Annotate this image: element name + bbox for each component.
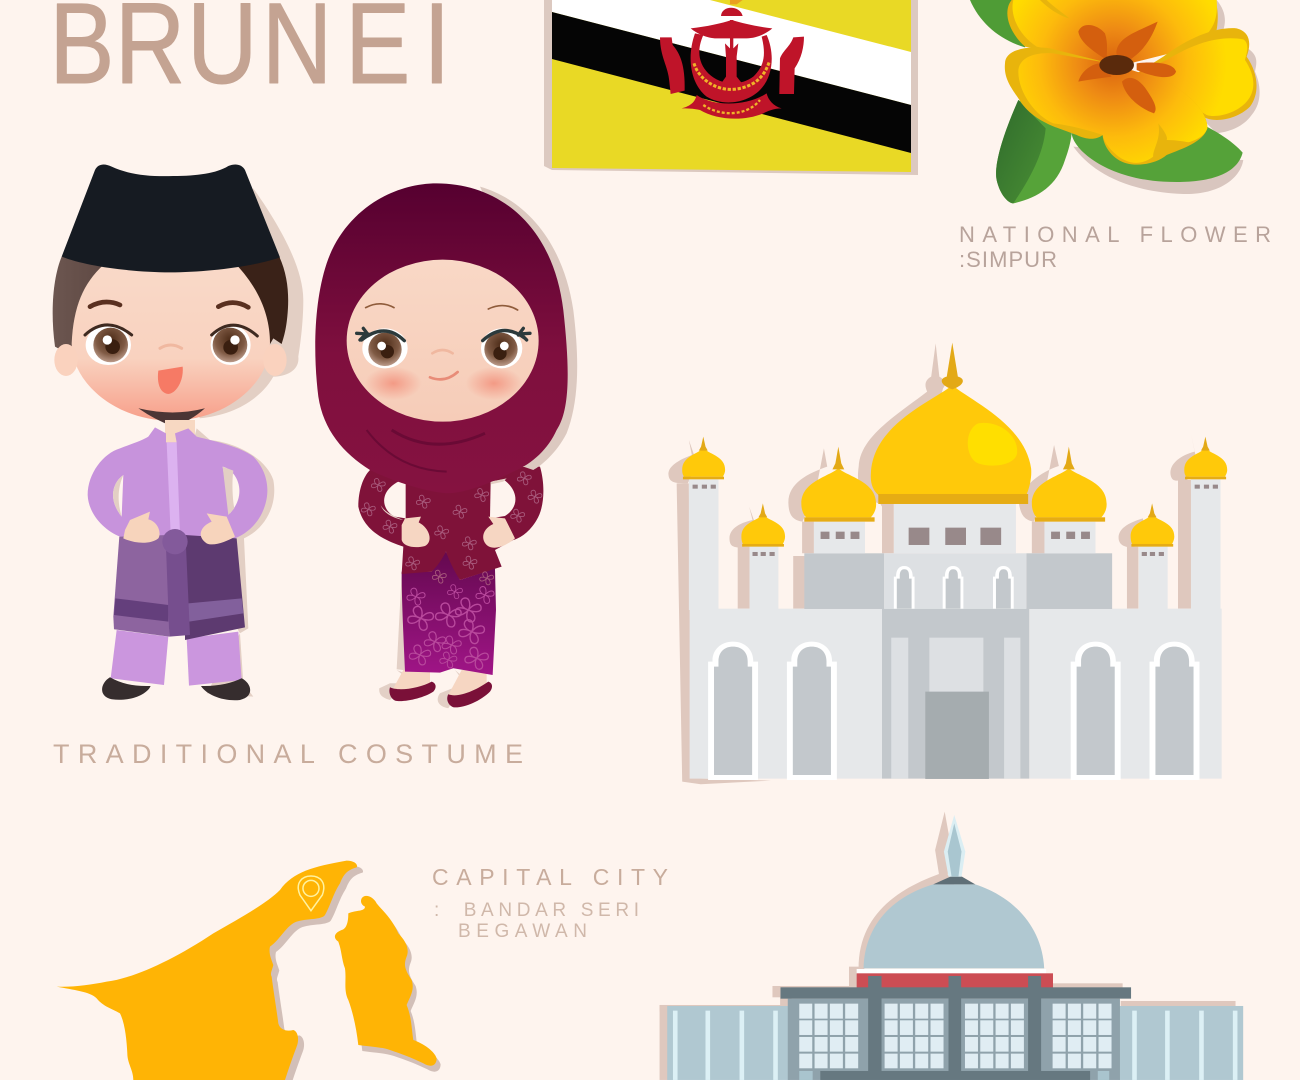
capital building: shadow	[660, 812, 1236, 1080]
icon: flag crest	[660, 0, 804, 119]
woman: head and hijab	[315, 183, 577, 493]
flag of Brunei	[544, 0, 918, 175]
capital building: spire	[944, 815, 965, 877]
petals	[1007, 0, 1218, 67]
mosque: small tower right	[1131, 503, 1174, 609]
woman: hands	[402, 517, 430, 547]
man: head	[53, 164, 303, 427]
mosque: minaret left	[682, 437, 725, 610]
woman: skirt	[402, 552, 496, 675]
flower centre	[1078, 25, 1107, 60]
capital building: columns and roof	[781, 976, 1131, 1080]
mosque: main dome	[871, 385, 1031, 495]
mosque: drop shadow	[668, 343, 1196, 784]
mosque: door	[925, 692, 989, 779]
capital building: red frieze	[857, 969, 1046, 974]
label: simpur: :SIMPUR	[959, 247, 1057, 272]
leaf: lower	[996, 100, 1072, 203]
map: temburong district	[335, 896, 437, 1066]
label: begawan: BEGAWAN	[458, 921, 587, 942]
mosque: side dome left	[801, 447, 876, 553]
map of Brunei	[57, 861, 441, 1080]
mosque	[668, 343, 1227, 784]
label: national flower: NATIONAL FLOWER	[959, 222, 1271, 247]
man: body	[88, 420, 274, 700]
capital building: central block	[788, 999, 1120, 1080]
capital building: dome	[864, 884, 1044, 968]
mosque: minaret right	[1184, 437, 1227, 610]
mosque: lower walls	[690, 609, 882, 779]
leaf: top left	[970, 0, 1037, 47]
label: traditional costume: TRADITIONAL COSTUME	[53, 739, 523, 769]
man in traditional costume	[53, 164, 303, 700]
map: coastline shadow	[270, 866, 441, 1080]
capital building: wings	[667, 1006, 790, 1080]
map: western district	[57, 861, 357, 1080]
label: bandar seri begawan: : BANDAR SERI	[434, 900, 639, 921]
mosque: arched windows	[708, 642, 758, 780]
leaf: right	[1072, 127, 1243, 182]
mosque: side dome right	[1032, 447, 1107, 553]
woman: dress floral pattern	[361, 472, 542, 585]
woman: blouse	[358, 467, 543, 580]
woman in traditional costume	[315, 183, 577, 708]
national flower: simpur	[970, 0, 1260, 203]
mosque: middle block	[804, 553, 884, 609]
mosque: drum	[894, 503, 1016, 553]
capital building	[660, 812, 1243, 1080]
woman: lower body	[358, 467, 543, 708]
icon: location pin	[298, 876, 324, 911]
mosque: small tower left	[741, 503, 785, 609]
label: capital city: CAPITAL CITY	[432, 864, 668, 890]
capital building: windows	[799, 1004, 858, 1068]
